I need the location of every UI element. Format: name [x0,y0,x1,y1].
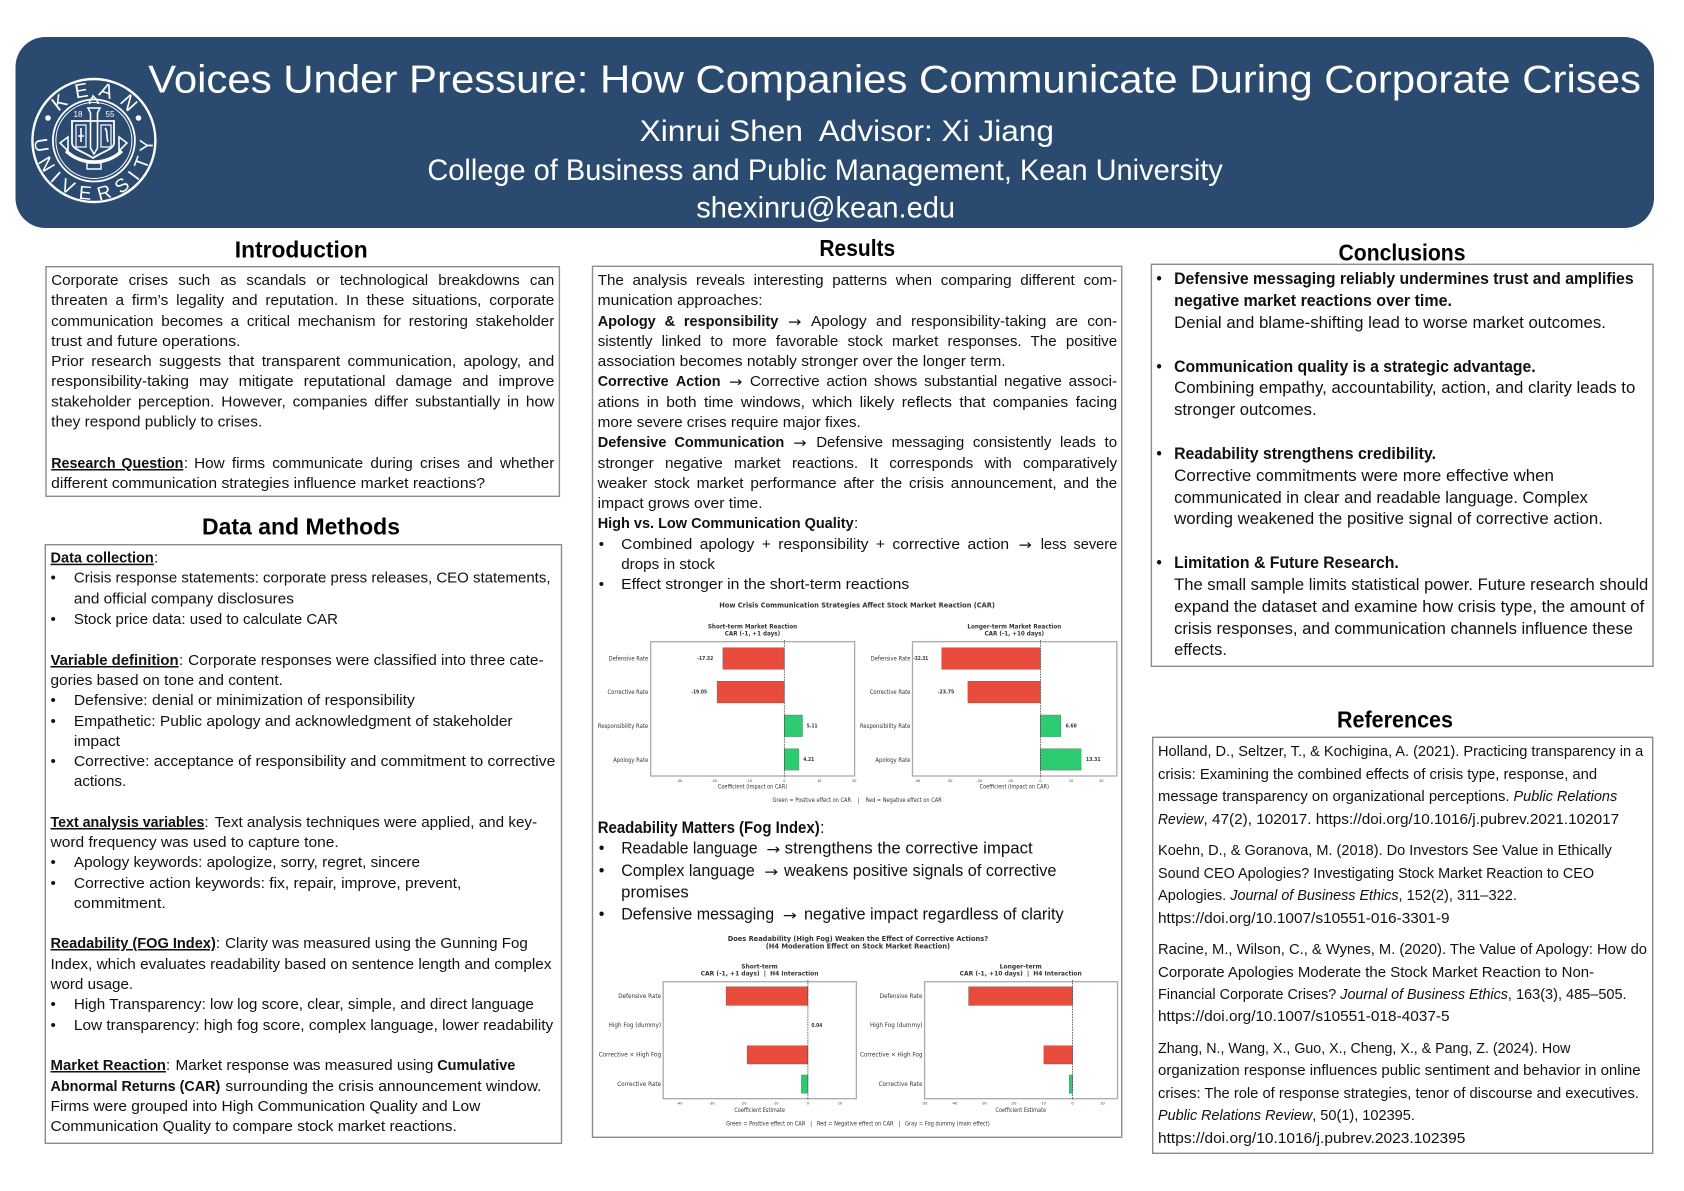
reference: Holland: message transparency on organizational perceptions. [1158,788,1510,805]
chart: short-term: 5.11 [807,724,818,730]
chart: short-term: Coefficient (Impact on CAR) [718,785,787,791]
text: results findings: Defensive messaging consistently leads to [816,434,1117,451]
panel: data and methods [45,513,562,1143]
text: conclusion 3: Corrective commitments were more effective when [1174,467,1554,485]
text: readability matters: Readable language [621,840,758,858]
reference: Zhang: Public Relations Review [1158,1107,1313,1124]
icon: Kean University seal: UNIVERSITY [34,138,153,200]
text: results findings: Defensive Communication [598,434,784,451]
header banner [16,37,1654,228]
chart title: Does Readability (High Fog) Weaken the Effect of Corrective Actions? [728,935,988,943]
text: results findings: → [729,374,743,390]
text: results findings: ations in both time windows, which likely reflects that companies facing [598,394,1117,411]
reference: Holland: Public Relations [1514,788,1618,805]
chart title [728,935,988,951]
reference: Racine [1158,941,1647,1025]
chart: longer-term interaction: Corrective Rate [879,1081,923,1088]
chart: short-term: 10 [817,779,821,783]
text: market reaction: Communication Quality to compare stock market reactions. [50,1118,457,1135]
chart: short-term interaction: Corrective Rate [617,1081,661,1088]
text: results findings: • [599,536,604,553]
reference: Racine: https://doi.org/10.1007/s10551-018-4037-5 [1158,1008,1450,1025]
text: introduction body: Prior research suggests that transparent communication, apology, and [51,353,554,370]
text: conclusion 3: wording weakened the positive signal of corrective action. [1173,510,1603,528]
chart: longer-term interaction: Corrective × High Fog [860,1052,923,1058]
reference: Holland: Holland, D., Seltzer, T., & Kochigina, A. (2021). Practicing transparency in a [1158,743,1644,760]
heading: data and methods: Data and Methods [202,513,400,539]
reference: Zhang [1158,1040,1641,1147]
text: conclusion 2: • [1156,358,1162,376]
text: conclusion 3: Readability strengthens credibility. [1174,445,1436,463]
text: market reaction: Cumulative [437,1057,515,1074]
chart: longer-term interaction: 0 [1071,1102,1074,1106]
reference: Racine: Journal of Business Ethics [1339,986,1508,1003]
text: readability matters: promises [621,884,689,902]
text: results findings: High vs. Low Communication Quality [598,515,854,532]
text: research question [51,455,554,492]
text: text analysis variables: Text analysis techniques were applied, and key- [215,814,537,831]
reference: Holland: crisis: Examining the combined effects of crisis type, response, and [1158,766,1597,783]
text: market reaction: Abnormal Returns (CAR) [50,1078,220,1095]
text: variable definition: Corporate responses were classified into three cate- [188,652,544,669]
text: conclusion 4: effects. [1174,641,1227,659]
chart: longer-term: Corrective Rate [870,689,911,696]
chart: longer-term: Defensive Rate [871,656,911,662]
chart: longer-term: Longer-term Market Reaction [967,623,1062,631]
text: variable definition: Variable definition [50,652,179,669]
text: results findings: less severe [1041,536,1117,553]
reference: Zhang: , 50(1), 102395. [1312,1107,1415,1124]
chart: short-term: 0 [783,779,785,783]
chart: short-term: Corrective Rate [608,689,648,696]
chart: longer-term: -32.31 [913,656,929,662]
text: readability matters: → [783,908,797,924]
text: results findings: Combined apology + responsibility + corrective action [621,536,1009,553]
icon: Kean University seal [31,78,157,204]
reference: Zhang: https://doi.org/10.1016/j.pubrev.2023.102395 [1158,1130,1465,1147]
text: variable definition: Empathetic: Public apology and acknowledgment of stakeholder [74,713,513,730]
chart: short-term: Responsibility Rate [598,723,648,730]
text: text analysis variables: • [50,875,56,892]
text: readability matters: Complex language [621,862,755,880]
panel: results [592,235,1122,1137]
heading: conclusions: Conclusions [1338,240,1466,266]
chart: longer-term interaction: -30 [981,1102,987,1106]
text: readability matters: • [599,906,605,924]
chart: short-term interaction: -10 [773,1102,778,1106]
reference: Koehn [1158,842,1612,927]
text: introduction body: stakeholder perception. However, companies differ substantially in how [51,394,554,411]
text: data collection [50,550,550,628]
text: text analysis variables: Corrective action keywords: fix, repair, improve, prevent, [74,875,461,892]
reference: Holland [1158,743,1644,828]
chart: longer-term: Coefficient (Impact on CAR) [980,785,1049,791]
text: variable definition: actions. [74,773,126,790]
text: readability fog index: word usage. [50,976,133,993]
chart: longer-term: 10 [1069,779,1073,783]
text: text analysis variables: Text analysis variables [50,814,204,831]
text: conclusion 4: crisis responses, and communication channels influence these [1174,620,1633,638]
chart: longer-term: CAR (-1, +10 days) [984,629,1044,637]
text: results findings: The analysis reveals interesting patterns when comparing different com- [598,272,1117,289]
reference: Koehn: https://doi.org/10.1007/s10551-016-3301-9 [1158,910,1450,927]
text: results findings: → [1019,538,1032,554]
text: conclusion 2: Communication quality is a strategic advantage. [1174,358,1536,376]
text: conclusion 2: Combining empathy, accountability, action, and clarity leads to [1174,379,1635,397]
text: readability fog index: Low transparency: high fog score, complex language, lower readability [74,1017,554,1034]
chart: short-term interaction: Coefficient Estimate [734,1108,785,1114]
chart: longer-term: 20 [1099,779,1104,783]
chart: short-term: CAR (-1, +1 days) [725,629,780,637]
chart: longer-term interaction: -10 [1040,1102,1046,1106]
text: market reaction: Firms were grouped into High Communication Quality and Low [50,1098,480,1115]
text: results findings: munication approaches: [598,292,763,309]
text: data collection: Data collection [50,550,154,567]
text: conclusion 1: negative market reactions over time. [1174,292,1452,310]
bar chart: market reaction by strategy [598,601,1117,804]
text: results findings: : [854,515,858,532]
heading: introduction: Introduction [235,237,368,263]
text: data collection: : [154,550,158,567]
chart: short-term: -19.05 [691,690,707,696]
chart: short-term interaction: 0 [807,1102,809,1106]
heading: references: References [1337,706,1453,732]
reference: Racine: Corporate Apologies Moderate the Stock Market Reaction to Non- [1158,964,1594,981]
chart: longer-term interaction: 10 [1100,1102,1105,1106]
reference: Koehn: Sound CEO Apologies? Investigating Stock Market Reaction to CEO [1158,865,1594,882]
text: variable definition: : [179,652,183,669]
text: results findings: sistently linked to more favorable stock market responses. The positive [598,333,1117,350]
text: research question: Research Question [51,455,183,472]
text: results findings: Effect stronger in the short-term reactions [621,576,910,593]
reference: Zhang: organization response influences public sentiment and behavior in online [1158,1062,1641,1079]
text: market reaction: : [166,1057,170,1074]
text: conclusion 1: • [1156,270,1162,288]
text: conclusion 2 [1156,358,1635,419]
text: conclusion 1: Defensive messaging reliably undermines trust and amplifies [1174,270,1634,288]
text: variable definition: gories based on tone and content. [50,672,283,689]
chart title: How Crisis Communication Strategies Affect Stock Market Reaction (CAR) [719,601,995,609]
chart: short-term interaction: 0.04 [811,1023,823,1029]
text: introduction body [51,272,554,431]
chart legend: Green = Positive effect on CAR | Red = Negative effect on CAR | Gray = Fog dummy (main effect) [726,1121,990,1127]
reference: Zhang: crises: The role of response strategies, tenor of discourse and executives. [1158,1085,1639,1102]
text: results findings: → [788,314,802,330]
text: market reaction: Market Reaction [50,1057,166,1074]
text: results findings: Corrective action shows substantial negative associ- [750,373,1117,390]
text: readability matters: → [766,842,781,858]
text: conclusion 4 [1156,554,1648,659]
chart: short-term interaction: 10 [838,1102,842,1106]
reference: Racine: , 163(3), 485–505. [1508,986,1627,1003]
text: readability fog index: Index, which evaluates readability based on sentence length and complex [50,956,552,973]
text: conclusion 4: • [1156,554,1162,572]
text: readability matters: strengthens the corrective impact [785,840,1033,858]
text: results findings: impact grows over time. [598,495,763,512]
text: results findings: Corrective Action [598,373,720,390]
chart: short-term interaction: High Fog (dummy) [609,1022,661,1029]
text: conclusion 3: communicated in clear and readable language. Complex [1174,489,1588,507]
chart: longer-term interaction: -50 [922,1102,927,1106]
text: readability fog index: • [50,996,56,1013]
reference: Koehn: Apologies. [1158,887,1226,904]
chart: short-term: -10 [747,779,752,783]
text: variable definition: impact [74,733,121,750]
chart: longer-term: -23.75 [938,690,955,696]
text: readability matters: negative impact regardless of clarity [804,906,1065,924]
chart: longer-term interaction [860,963,1118,1114]
text: text analysis variables: word frequency was used to capture tone. [49,834,339,851]
chart: short-term: -30 [677,779,682,783]
text: text analysis variables: Apology keywords: apologize, sorry, regret, sincere [74,854,420,871]
bar chart: fog moderation effect [599,935,1118,1127]
chart: short-term: -17.32 [697,656,714,662]
text: data collection: • [50,611,56,628]
text: conclusion 3: • [1156,445,1162,463]
chart: longer-term: 0 [1039,779,1041,783]
chart: short-term [598,623,856,791]
chart: longer-term interaction: High Fog (dummy) [870,1022,922,1029]
reference: Koehn: , 152(2), 311–322. [1398,887,1517,904]
text: conclusion 3 [1156,445,1603,528]
text: readability fog index: • [50,1017,56,1034]
chart: longer-term: -40 [915,779,920,783]
chart: longer-term interaction: Longer-term [1000,963,1042,971]
reference: Racine: Racine, M., Wilson, C., & Wynes, M. (2020). The Value of Apology: How do [1158,941,1647,958]
chart: longer-term: 13.31 [1086,757,1101,763]
reference: Racine: Financial Corporate Crises? [1158,986,1336,1003]
chart: short-term: Defensive Rate [609,656,648,662]
text: research question: How firms communicate during crises and whether [194,455,554,472]
text: readability matters: • [599,840,605,858]
text: market reaction: surrounding the crisis announcement window. [225,1078,542,1095]
chart: short-term: 20 [852,779,856,783]
chart: longer-term: -30 [947,779,952,783]
text: conclusion 4: expand the dataset and examine how crisis type, the amount of [1174,598,1645,616]
text: results findings: association becomes notably stronger over the longer term. [598,353,1006,370]
heading: results: Results [819,235,895,261]
chart: short-term interaction: Short-term [741,963,778,971]
text: variable definition: • [50,692,56,709]
chart: longer-term: Responsibility Rate [860,723,911,730]
text: readability matters: • [599,862,605,880]
chart: longer-term interaction: Coefficient Estimate [995,1108,1046,1114]
panel: references [1153,706,1653,1153]
authors: Xinrui Shen Advisor: Xi Jiang [640,115,1054,148]
affiliation: College of Business and Public Management, Kean University [427,154,1223,187]
text: text analysis variables [49,814,537,912]
icon: Kean University seal: KEAN [51,82,138,112]
text: introduction body: Corporate crises such as scandals or technological breakdowns can [51,272,554,289]
text: data collection: Crisis response statements: corporate press releases, CEO statements, [74,570,551,587]
chart: longer-term: 6.60 [1066,724,1077,730]
icon: Kean University seal: 18 [74,110,83,119]
text: readability matters: Defensive messaging [621,906,774,924]
text: introduction body: responsibility-taking may mitigate reputational damage and improve [51,373,554,390]
text: text analysis variables: • [50,854,56,871]
text: readability fog index: Clarity was measured using the Gunning Fog [225,935,528,952]
text: results findings: Apology & responsibility [598,313,779,330]
text: conclusion 1 [1156,270,1634,332]
reference: Holland: , 47(2), 102017. https://doi.org/10.1016/j.pubrev.2021.102017 [1204,811,1619,828]
text: results findings: Apology and responsibility-taking are con- [811,313,1117,330]
chart title: (H4 Moderation Effect on Stock Market Reaction) [766,943,950,951]
text: results findings: stronger negative market reactions. It corresponds with comparatively [598,455,1118,472]
chart: longer-term [860,623,1117,791]
chart: short-term interaction: -40 [677,1102,682,1106]
chart: longer-term interaction: -20 [1011,1102,1016,1106]
text: variable definition: • [50,753,56,770]
chart: short-term interaction: -20 [741,1102,746,1106]
text: text analysis variables: commitment. [74,895,166,912]
text: conclusion 1: Denial and blame-shifting lead to worse market outcomes. [1174,314,1606,332]
text: readability matters: → [764,864,779,880]
text: data collection: and official company disclosures [74,591,294,608]
text: variable definition: • [50,713,56,730]
text: readability fog index: Readability (FOG Index) [50,935,216,952]
text: conclusion 4: The small sample limits statistical power. Future research should [1174,576,1648,594]
text: conclusion 2: stronger outcomes. [1174,401,1317,419]
text: market reaction [50,1057,542,1135]
text: research question: different communication strategies influence market reactions? [51,475,485,492]
reference: Koehn: Journal of Business Ethics [1229,887,1399,904]
chart: longer-term interaction: Defensive Rate [880,993,923,1000]
text: readability fog index: High Transparency: low log score, clear, simple, and direct language [74,996,534,1013]
chart: short-term: Apology Rate [613,757,648,764]
chart: longer-term interaction: -40 [952,1102,957,1106]
reference: Zhang: Zhang, N., Wang, X., Guo, X., Cheng, X., & Pang, Z. (2024). How [1158,1040,1571,1057]
chart: short-term interaction: Defensive Rate [618,993,661,1000]
chart: short-term: -20 [712,779,717,783]
text: readability matters: weakens positive signals of corrective [783,862,1056,880]
panel: conclusions [1151,240,1653,666]
chart: short-term: Short-term Market Reaction [708,623,797,631]
text: conclusion 4: Limitation & Future Research. [1174,554,1399,572]
chart: longer-term: Apology Rate [875,757,911,764]
text: variable definition: Corrective: acceptance of responsibility and commitment to corrective [74,753,555,770]
chart: longer-term: -10 [1008,779,1013,783]
chart: short-term interaction: -30 [709,1102,715,1106]
text: results findings [597,272,1118,593]
text: readability fog index [50,935,554,1034]
chart: short-term: 4.21 [803,757,815,763]
chart legend: Green = Positive effect on CAR | Red = Negative effect on CAR [772,798,942,804]
text: readability matters: : [820,819,824,837]
text: introduction body: trust and future operations. [51,333,241,350]
chart: longer-term: -20 [977,779,982,783]
panel: introduction [46,237,559,496]
text: research question: : [184,455,188,472]
text: readability matters: Readability Matters (Fog Index) [598,819,820,837]
text: results findings: more severe crises require major fixes. [598,414,861,431]
text: data collection: • [50,570,56,587]
reference: Koehn: Koehn, D., & Goranova, M. (2018). Do Investors See Value in Ethically [1158,842,1612,859]
text: results findings: weaker stock market performance after the crisis announcement, and the [597,475,1117,492]
text: market reaction: Market response was measured using [176,1057,433,1074]
text: introduction body: threaten a firm’s legality and reputation. In these situations, corporate [51,292,554,309]
text: introduction body: they respond publicly to crises. [51,414,262,431]
chart: short-term interaction: CAR (-1, +1 days) | H4 Interaction [701,970,819,979]
text: readability matters [598,819,1065,924]
text: results findings: drops in stock [621,556,715,573]
chart: short-term interaction [599,963,856,1114]
chart: short-term interaction: Corrective × High Fog [599,1052,661,1058]
email: shexinru@kean.edu [696,192,955,225]
reference: Holland: Review [1158,811,1205,828]
text: introduction body: communication becomes a critical mechanism for restoring stakeholder [51,313,554,330]
text: variable definition: Defensive: denial or minimization of responsibility [74,692,415,709]
text: results findings: → [793,436,807,452]
poster title: Voices Under Pressure: How Companies Communicate During Corporate Crises [148,59,1641,102]
text: readability fog index: : [216,935,220,952]
icon: Kean University seal: 55 [106,110,115,119]
text: data collection: Stock price data: used to calculate CAR [74,611,338,628]
chart: longer-term interaction: CAR (-1, +10 days) | H4 Interaction [960,970,1082,979]
text: results findings: • [599,576,604,593]
text: text analysis variables: : [204,814,209,831]
text: variable definition [50,652,555,790]
